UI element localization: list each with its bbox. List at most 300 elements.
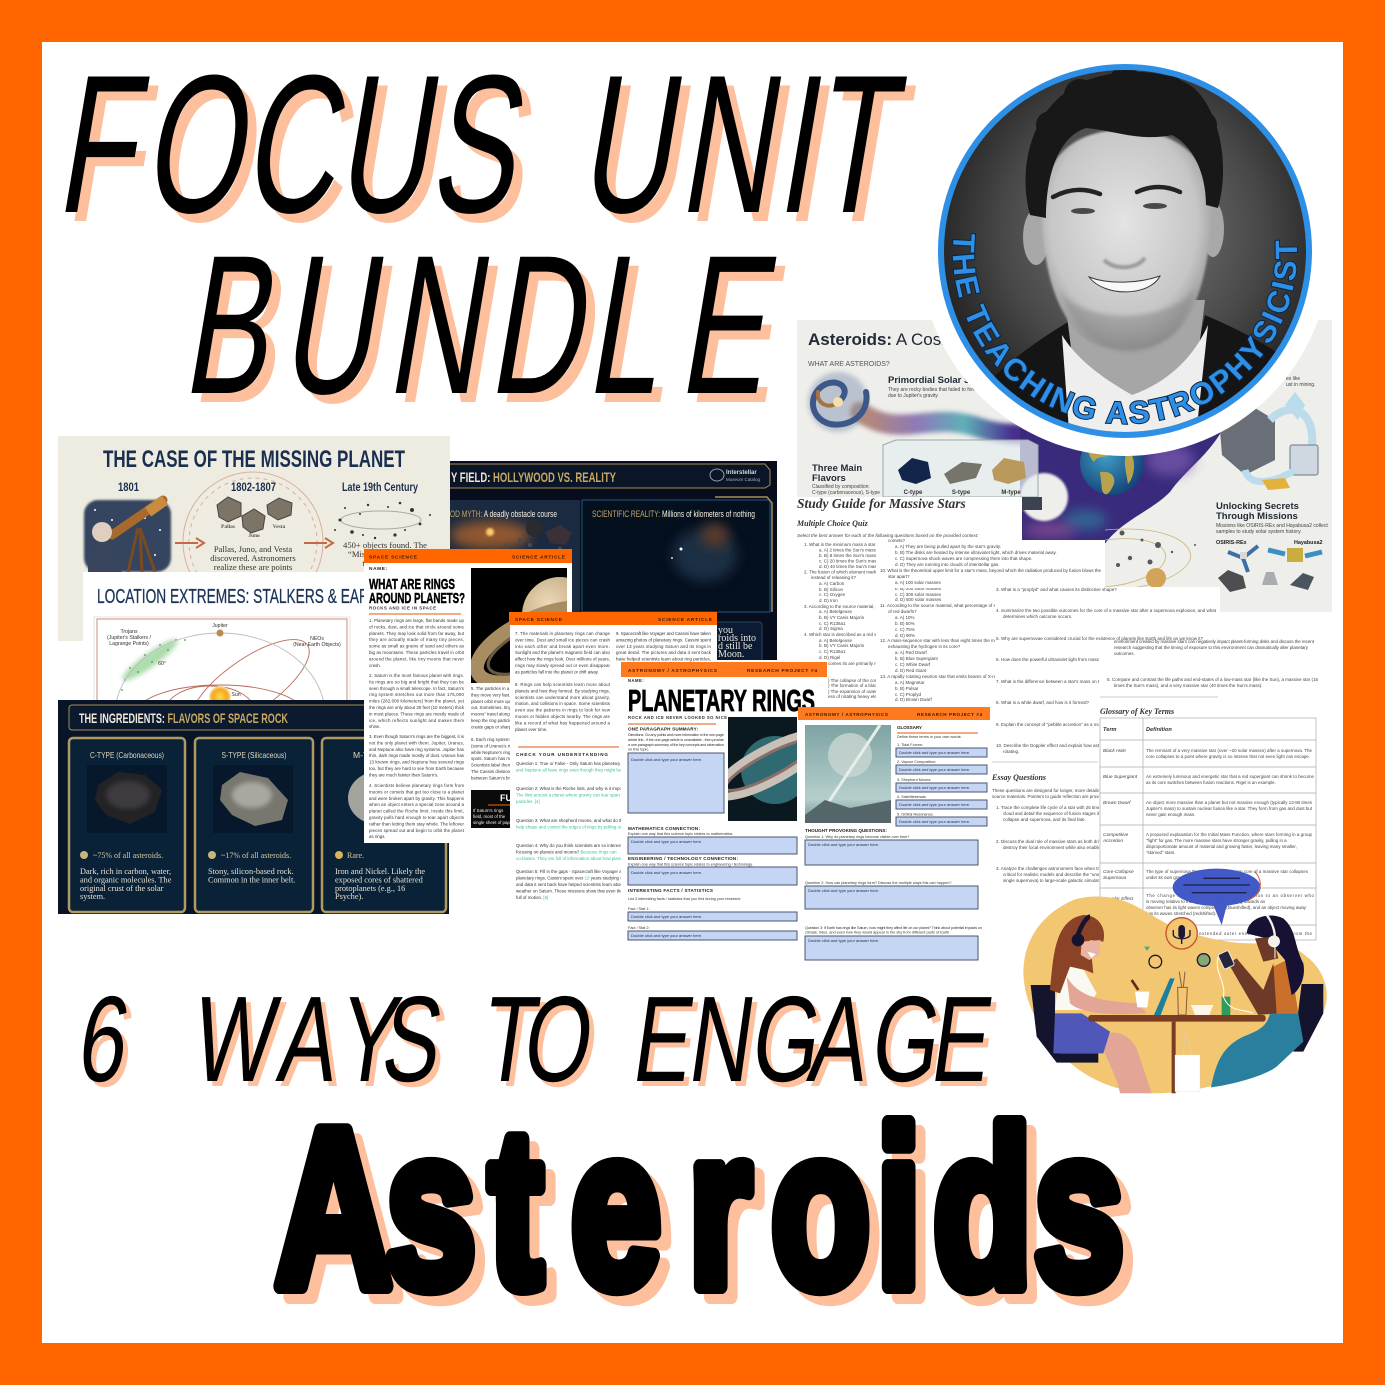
quiz column two: c. C) Supernova shock waves are compressing them into that shape. [895,556,1032,561]
mathematics connection: Double click and type your answer here. [631,839,702,844]
three main flavors text: Three Main [812,463,862,474]
article text left column: and were broken apart by gravity. This happens [369,796,465,801]
article text left column: not the only planet with them. Jupiter, Uranus, [369,740,464,745]
icon: astronomer with telescope [84,500,171,572]
chart labels: (Near Earth Objects) [293,642,341,648]
article text left column: 1. Planetary rings are large, flat bands made up [369,618,465,623]
chart labels: Sun [231,692,241,698]
ears [1023,201,1224,265]
quiz column one: ) The formation of a black [828,683,880,688]
quiz column one: 2. The fusion of which element marks the end [804,570,895,574]
glossary table: core collapses to a point where gravity is so intense that not even light can escape. [1146,754,1310,759]
glass case with rock samples [880,440,1042,510]
glass case with rock samples: M-type [1001,490,1021,496]
article text column one: scientists can understand more about gravity, [515,695,610,700]
quiz column two: a. A) They are being pulled apart by the star's gravity. [895,544,1001,549]
discovery text: realize these are points [214,562,293,572]
article text left column: gravity pulls hard enough to tear apart objects [369,815,465,820]
left woman face [1081,940,1101,960]
quiz column two continued: 13. A rapidly rotating neutron star that emits beams of X-rays [880,674,1002,679]
short answer and essay column: collapse and supernova, and its final fate. [1003,817,1086,822]
glossary [896,725,987,826]
saturn image [466,568,614,698]
chart labels: 60° [158,661,166,667]
article text left column: seen through a small telescope. In fact, Saturn's [369,686,465,691]
quiz column two: a. A) 100 solar masses [895,580,942,585]
heading: what are rings: AROUND PLANETS? [369,590,465,607]
glossary: Double click and type your answer here. [899,767,970,772]
orange header: RESEARCH PROJECT #4 [747,668,817,674]
rock labels: Vesta [273,524,286,530]
bottom card: you [718,625,733,636]
glossary: 3. Shepherd Moons: [897,778,931,782]
jupiter [216,630,224,636]
table stem [1172,1022,1176,1093]
card: s-type: ~17% of all asteroids. [221,851,291,860]
face [1042,130,1212,350]
objects found text: 450+ objects found. The [343,540,427,550]
quiz column two: star apart? [888,574,910,579]
quiz column two continued: c. C) 300 solar masses [895,592,942,597]
short answer questions: determines which outcome occurs. [1003,614,1072,619]
article text left column: 2. Saturn is the most famous planet with rings. [369,673,464,678]
title: focus unit: FOCUS UNIT [48,35,917,254]
short answer and essay column: source materials. Pointers to guide reflection are provided [992,794,1108,799]
short answer and essay column: 8. What is a white dwarf, and how is it formed? [996,700,1090,705]
objects found text [343,542,427,566]
article text left column: ring system stretches out more than 175,000 [369,692,465,697]
glossary table: Core-Collapse [1103,869,1134,875]
essay text upper right: environment created by massive stars can negatively impact planet-forming disks and discuss the recent [1114,639,1315,644]
hollywood myth scene [450,500,580,612]
check your understanding [516,747,636,900]
name field: NAME: [628,678,644,683]
article text left column [369,618,465,839]
chart labels: NEOs [310,636,324,642]
engineering connection: Double click and type your answer here. [631,870,702,875]
thought provoking questions: Double click and type your answer here. [808,842,879,847]
title: focus unit: FOCUS UNIT [57,44,926,263]
check your understanding: CHECK YOUR UNDERSTANDING [516,752,608,757]
heading: multiple choice quiz: Multiple Choice Quiz [796,519,869,528]
quiz column one: 4. Which star is described as a red supergiant [804,632,896,637]
hair curls [1036,66,1217,139]
spacecraft and rocks [1218,546,1322,592]
article text left column: when an object enters a special zone around a [369,802,465,807]
article text left column: the rings are only about 30 feet (10 meters) thick [369,705,465,710]
glossary table: "starved" stars. [1146,850,1175,855]
card: c-type: and organic molecules. The [80,876,172,884]
three main flavors text: C-type (carbonaceous), S-type [812,490,880,496]
quiz column one: ) The collapse of the core [828,678,879,683]
right woman arm [1228,958,1277,1015]
article text left column: some as small as grains of sand and others as [369,644,465,649]
left headphone [1077,917,1090,938]
article text column one: as particles fall into the planet or drift away. [515,669,599,674]
missions text: Missions like OSIRIS-REx and Hayabusa2 collect [1216,523,1328,529]
stubble shading [1060,285,1197,352]
panel: asteroids a cosmic overview [797,320,1332,612]
left chair [1031,985,1098,1063]
scientific reality scene [582,497,772,612]
worksheet: what are rings around planets [364,549,614,843]
objects found text: thought to be [362,558,408,568]
glossary table: Definition [1146,727,1172,733]
left woman shorts [1053,1013,1110,1053]
article text left column: 13 known rings, and Neptune has several rings [369,760,465,765]
article text right column: Scientists label them [471,763,512,768]
microphone icon [1166,918,1197,949]
bottom card: roids into [718,633,756,644]
tablet [1154,978,1175,1015]
check your understanding: The limit around a planet where gravity can tear apart [516,792,621,798]
icon: earth [1080,431,1144,495]
article text left column: as rings. [369,834,386,839]
quiz column two continued: b. B) Blue Supergiant [895,656,939,661]
title: asteroids: Asteroids [275,1083,1124,1334]
three main flavors text [812,463,880,496]
interesting facts: List 3 interesting facts / statistics that you find during your research: [628,897,741,901]
glossary table: Brown Dwarf [1103,800,1131,806]
discovery text: Pallas, Juno, and Vesta [214,544,292,554]
chart labels: (Jupiter's Stalkers / [107,635,152,641]
article text left column: too, but they are hard to see from Earth because [369,766,465,771]
glossary table: The type of supernova that occurs when the iron core of a massive star collapses [1146,869,1309,874]
illustration: women with podcast [1023,869,1327,1093]
article text left column: ice, which reflects sunlight and makes them [369,718,464,723]
article text column one: affect how the rings look. Over millions of years, [515,657,610,662]
quiz column one [804,542,898,699]
panel: location extremes [83,572,364,700]
article text column one: Sunlight and the planet's magnetic field can also [515,650,611,655]
glossary table: Supernova [1103,875,1127,881]
interesting facts [628,888,797,940]
glossary table: observer has its light waves compressed (blueshifted), and an object moving away [1146,905,1307,910]
subheading: what are asteroids: WHAT ARE ASTEROIDS? [808,361,890,368]
short answer and essay column: 2. Discuss the dual role of massive stars as both drivers [996,839,1108,844]
quiz column two [880,538,1101,585]
article text left column: and Neptune also have ring systems. Jupiter has [369,747,465,752]
glossary table: as its core switches between fusion reactions. Rigel is an example. [1146,780,1276,785]
glossary: Double click and type your answer here. [899,819,970,824]
right woman shirt [1268,958,1298,1013]
glossary table: Doppler Effect [1103,896,1134,902]
quiz column two continued: c. C) Proplyd [895,692,922,697]
short answer and essay column: 7. What is the difference between a star's mass on the main [996,679,1116,684]
blue ring [938,64,1312,438]
quiz column two continued: b. B) 50% [895,621,915,626]
article text left column: shine. [369,724,381,729]
panel: the ingredients [58,700,449,914]
heading: study guide: Study Guide for Massive Stars [797,496,966,511]
jacket [950,315,1305,445]
quiz instructions: Select the best answer for each of the following questions based on the provided context: [797,533,979,538]
article text right column: planet orbit more quickly [471,699,519,704]
quiz column one: b. B) VY Canis Majoris [819,643,865,648]
essay text upper right [1100,639,1318,697]
article text right column: If Saturn's rings [473,808,504,813]
profile badge [932,64,1318,456]
glossary table: Accretion [1102,838,1123,844]
article text column one: planets and how they formed. By studying rings, [515,688,610,693]
tagline: 6 ways to engage: 6 WAYS TO ENGAGE [76,977,1006,1112]
interesting facts: Double click and type your answer here. [631,933,702,938]
worksheet: research project glossary [798,707,990,964]
orange header [621,662,827,677]
short answer questions: 5. Why are supernovae considered crucial for the existence of planets like Earth and life as we know it? [996,636,1203,641]
short answer and essay column: cloud and detail the sequence of fusion stages it undergoes [1003,811,1122,816]
article text column two: amazing photos of planetary rings. Cassini spent [616,637,712,642]
check your understanding: Question 2: What is the Roche limit, and why is it important? [516,786,634,791]
quiz column two: 10. What is the theoretical upper limit for a star's mass, beyond which the radiation produced by fusion blows the [880,568,1101,573]
quiz column two continued: b. B) 200 solar masses [895,586,942,591]
glossary table: The remnant of a very massive star (over ~20 solar masses) after a supernova. The [1146,748,1313,753]
ornate circle behind rocks [182,472,324,572]
glossary: GLOSSARY [897,725,922,730]
thought provoking questions: Double click and type your answer here. [808,888,879,893]
article text left column: 3. Even though Saturn's rings are the biggest, it is [369,734,465,739]
quiz column two continued: c. C) White Dwarf [895,662,931,667]
primordial text [888,376,976,398]
card: s-type [195,738,313,912]
glossary table: An object more massive than a planet but not massive enough (typically 13-80 times [1146,800,1313,805]
short answer questions: 3. What is a "proplyd" and what causes its distinctive shape? [996,587,1117,592]
check your understanding: and Neptune all have rings even though they might be [516,768,622,772]
coffee cup [1135,992,1149,1007]
glossary: Define these terms in your own words: [897,735,962,739]
short answer and essay column [991,657,1122,883]
quiz column two continued: 12. A main-sequence star with less than eight times the mass [880,638,1003,643]
timeline labels: 1801 [118,480,139,494]
article text column one: planet over time. [515,727,547,732]
portrait photo [938,64,1312,445]
missions heading: Unlocking Secrets [1216,501,1299,512]
rocks: pallas, juno, vesta [217,497,292,533]
short answer and essay column: rotating. [1003,749,1019,754]
article text right column [471,686,524,828]
glossary table: A process where the extended outer envelope is stripped from the [1146,931,1313,936]
primordial text: They are rocky bodies that failed to form [888,387,977,393]
right ear cup [1268,935,1280,947]
left woman smile [1087,952,1096,958]
one paragraph summary: on this topic. [628,748,649,752]
three main flavors text: Classified by composition: [812,484,870,490]
icon: spiral galaxy [808,372,868,432]
one paragraph summary: a one-paragraph summary of the key concepts and information [628,743,724,747]
shirt [1062,325,1208,445]
speech bubble [1173,869,1261,925]
article text column one: like a record of what has happened around a [515,720,611,725]
short answer and essay column: 10. Describe the Doppler effect and explain how astronomers [996,743,1119,748]
orange header: RESEARCH PROJECT #4 [917,712,982,717]
article text left column: moons or comets that get too close to a planet [369,789,465,794]
quiz column two continued: exhausting the hydrogen in its core? [888,644,961,649]
check your understanding: co-biases. They are full of information about how planets [516,856,627,861]
card: m-type: protoplanets (e.g., 16 [335,884,405,893]
check your understanding: focusing on planets and moons? Because rings can [516,850,617,854]
discovery text [210,544,296,572]
article text right column: keep the ring particles [471,718,515,723]
check your understanding: Question 4: Why do you think scientists are so interested in [516,843,632,848]
article text column one: into each other and break apart even more. [515,644,610,649]
card: m-type: exposed cores of shattered [335,876,424,884]
quiz column one: 3. According to the source material, which star [804,604,897,609]
check your understanding: Question 1: True or False - Only Saturn has planetary rings. [516,761,632,766]
orange header [798,707,990,720]
interesting facts: INTERESTING FACTS / STATISTICS [628,888,713,893]
card: m-type: Rare. [347,851,364,860]
orange header: SCIENCE ARTICLE [512,554,566,560]
panel: hollywood vs reality [450,461,777,672]
article text column one: moons or hidden objects nearby. The rings are [515,714,611,719]
quiz column one: a. A) Betelgeuse [819,609,853,614]
glossary: 2. Vapour Composition: [897,760,936,764]
eyebrows [1053,187,1180,197]
quiz column two continued: of red dwarfs? [888,609,917,614]
card: m-type [322,738,446,912]
missions heading: Through Missions [1216,511,1298,522]
glossary: 1. Tidal Forces: [897,743,923,747]
heading: glossary of key terms: Glossary of Key Terms [1100,707,1174,716]
glossary table: has its waves stretched (redshifted). [1146,911,1216,916]
article text right column: while Neptune's rings [471,750,513,755]
quiz column two continued: d. D) Brown Dwarf [895,697,933,702]
right woman face [1255,937,1278,962]
missions text [1216,523,1328,535]
quiz column two continued: b. B) Pulsar [895,686,919,691]
timeline labels: Late 19th Century [342,480,418,494]
short answer and essay column: Essay Questions [991,773,1046,782]
check your understanding: Question 3: What are shepherd moons, and what do they do? [516,818,636,823]
thought provoking questions: THOUGHT PROVOKING QUESTIONS: [805,828,887,833]
one paragraph summary [628,724,724,813]
heading: location extremes: LOCATION EXTREMES: STALKERS & EARTH [97,586,387,608]
bowl [1191,1005,1213,1015]
article text right column: field, most of the [473,814,506,819]
orange header: SPACE SCIENCE [515,617,563,623]
quiz column one: c. C) R136a1 [819,649,846,654]
glass case with rock samples: S-type [952,490,971,496]
sun [209,686,231,700]
title bar [69,705,369,730]
quiz column one: b. B) Silicon [819,587,844,592]
heading: missing planet: THE CASE OF THE MISSING PLANET [103,446,405,473]
check your understanding: particles. [4] [516,799,540,804]
one paragraph summary: Directions: Go any points and more information in the one-page [628,733,724,737]
bottom card [717,622,762,660]
mining machine illustration [1220,392,1318,490]
check your understanding: and data it sent back have helped scientists learn about [516,882,625,887]
card: c-type: system. [80,892,105,901]
title bar [450,464,770,488]
vase and reeds [1178,972,1187,1015]
arrow two [304,538,333,548]
card: c-type [69,738,185,912]
thought provoking questions: Question 3: If Earth has rings like Saturn, how might they affect life on our planet? Think about potential impacts on [805,926,982,930]
glossary table: A proposed explanation for the Initial Mass Function, where stars forming in a group [1146,832,1313,837]
left woman legs [1100,1033,1152,1093]
glossary table: An extremely luminous and energetic star that a red supergiant can shrink to become [1146,774,1315,779]
article text column one: 7. The materials in planetary rings can change [515,631,611,636]
thought provoking questions: Question 1: Why do planetary rings become visible over time? [805,835,909,839]
interesting facts: Fact / Stat 2: [628,926,650,930]
essay text upper right: times the Sun's mass), and a very massive star (40 times the Sun's mass). [1114,683,1263,688]
article text right column: 6. Each ring system is [471,737,515,742]
peach blob [1023,897,1327,1093]
article text right column: between Saturn's bright [471,775,518,780]
article text column one: rings may slowly spread out or even disappear [515,663,611,668]
phone [1218,950,1235,969]
thumbs icon [1197,954,1210,966]
glossary table: is moving relative to the source. An object moving towards an [1146,899,1266,904]
article text left column: thin, dark rings made mostly of dust. Uranus has [369,753,465,758]
arrow one [175,538,204,548]
article text right column: (some of Uranus's rings [471,743,518,748]
nebula ribbon [860,412,1225,545]
subheading: ROCKS AND ICE IN SPACE [369,606,436,610]
article text right column: moons" travel along the [471,712,518,717]
right woman jeans [1211,1013,1303,1087]
glossary: 5. Orbital Resonance: [897,812,934,816]
quiz column one: a. A) Betelgeuse [819,638,853,643]
essay text upper right: outcomes. [1114,651,1135,656]
short answer questions: 4. Summarize the two possible outcomes for the core of a massive star after a supernova explosion, and what [996,608,1217,613]
chart labels: Lagrange Points) [109,641,149,647]
curved brand text: THE TEACHING ASTROPHYSICIST [952,233,1298,425]
heading: what are rings: WHAT ARE RINGS [369,576,455,593]
mining caption: ust in mining. [1286,382,1315,388]
check your understanding: planetary rings. Cassini spent over 13 years studying Saturn [516,876,634,880]
article text left column: rather than letting them stay whole. The leftover [369,821,465,826]
article text left column: around the planet, like tiny moons that never [369,656,465,661]
article text column two: 9. Spacecraft like Voyager and Cassini have taken [616,631,712,636]
article text column two [616,631,712,662]
check your understanding: help shape and control the edges of rings by pulling on [516,824,623,830]
one paragraph summary: article link - if the one-page article is unavailable - then provide [628,738,724,742]
card: s-type: S-TYPE (Silicaceous) [222,750,287,760]
furniture and people [1031,915,1323,1093]
study guide page [796,496,1320,960]
quiz column two continued: d. D) Red Giant [895,668,927,673]
quiz column one: c. C) R136a1 [819,621,846,626]
article text right column: spots. Saturn has many [471,756,518,761]
orange header: SCIENCE ARTICLE [658,617,713,623]
article text left column: in most places. These rings are mostly made of [369,711,465,716]
article text column one: 8. Rings can help scientists learn more about [515,682,611,687]
quiz column two: d. D) They are running into clouds of interstellar gas. [895,562,999,567]
orange header: ASTRONOMY / ASTROPHYSICS [805,712,888,717]
left woman arm [1067,977,1147,1014]
logo [710,469,761,482]
article text left column: crash. [369,663,381,668]
interesting facts: Fact / Stat 1: [628,907,650,911]
article text left column: 4. Scientists believe planetary rings form from [369,783,464,788]
quiz column two continued: 11. According to the source material, what percentage of stars [880,603,1004,608]
article text right column: single sheet of paper [473,820,514,825]
quiz column one: d. D) Iron [819,598,838,603]
thought provoking questions: Double click and type your answer here. [808,938,879,943]
asteroid belt with jupiter [1105,529,1196,590]
glossary table: Blue Supergiant [1103,774,1138,780]
thought provoking questions: climate, tides, and even how they would appear in the sky from different parts of Earth. [805,930,950,934]
short answer questions [996,587,1217,641]
quiz column two continued: c. C) 75% [895,627,915,632]
earphone cord [1217,947,1275,1013]
short answer and essay column: 3. Analyze the challenges astronomers face when trying [996,866,1108,871]
timeline labels [118,482,418,494]
card: c-type: C-TYPE (Carbonaceous) [90,750,164,760]
mathematics connection: Explain one way that this science topic relates to mathematics. [628,832,733,836]
